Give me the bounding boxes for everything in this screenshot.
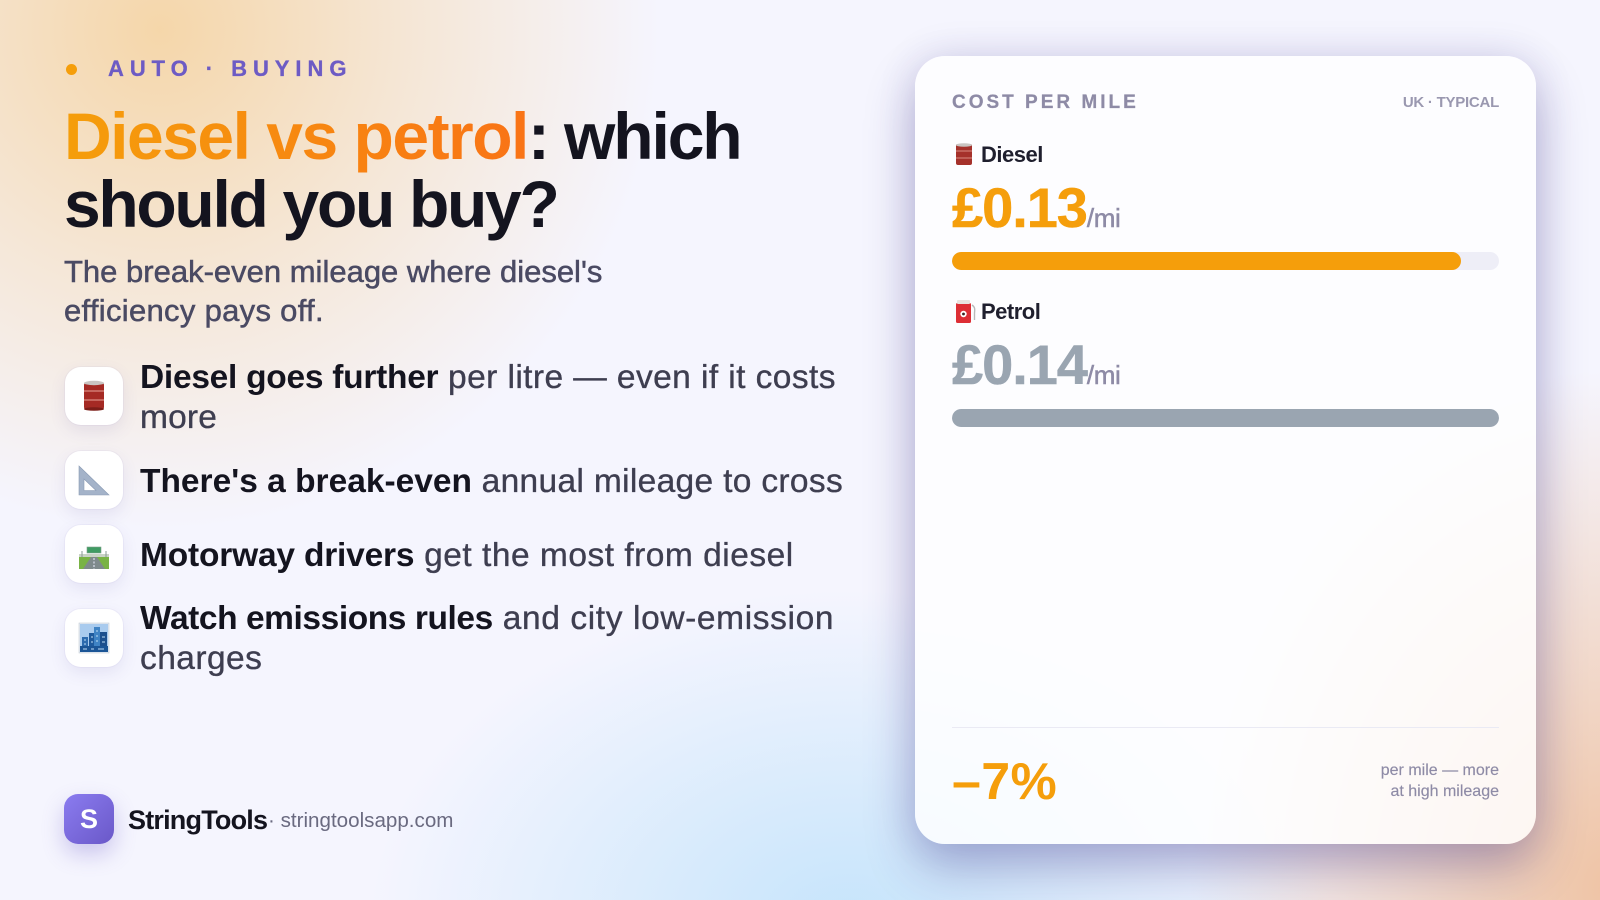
title: Diesel vs petrol: which [64,99,741,173]
bar: petrol [952,409,1499,427]
icon: oil drum small [956,143,972,165]
title [64,99,741,240]
diesel label [956,142,1043,167]
footer brand [54,794,453,864]
subtitle: The break-even mileage where diesel's [64,254,602,289]
bar: diesel [952,252,1499,270]
logo [64,794,114,844]
subtitle: efficiency pays off. [64,292,324,328]
savings note: at high mileage [1390,782,1499,800]
brand url: · stringtoolsapp.com [268,809,453,832]
bullet text: motorway drivers: Motorway drivers get the most from diesel [140,537,794,574]
diesel text: Diesel [981,142,1043,167]
panel: cost per mile [915,56,1536,844]
bullet text: emissions [140,600,834,677]
divider [952,727,1499,728]
panel tag: UK · TYPICAL [1403,94,1499,111]
subtitle [64,254,602,328]
bullet text: emissions: charges [140,640,262,677]
bullet text: emissions: Watch emissions rules and city low-emission [140,600,834,637]
icon: motorway [65,525,123,583]
petrol text: Petrol [981,299,1040,324]
savings figure: –7% [952,753,1057,811]
kicker [66,56,352,81]
petrol price: £0.14/mi [952,333,1120,396]
bullet text: diesel goes further [140,359,836,436]
logo: S [80,804,98,834]
brand name: StringTools [128,805,267,835]
bullet text: break-even: There's a break-even annual mileage to cross [140,463,843,500]
kicker text: AUTO · BUYING [108,56,352,81]
diesel price: £0.13/mi [952,176,1120,239]
panel heading: COST PER MILE [952,92,1139,113]
kicker dot [66,64,77,74]
bullet text: diesel goes further: Diesel goes further per litre — even if it costs [140,359,836,396]
icon: fuel pump [956,300,976,323]
bullet text: diesel goes further: more [140,399,217,436]
icon: oil drum [65,367,123,425]
savings note [1381,762,1499,800]
petrol label [956,299,1040,324]
icon: triangular ruler [65,451,123,509]
savings note: per mile — more [1381,762,1499,779]
title: should you buy? [64,166,557,240]
icon: cityscape [65,609,123,667]
